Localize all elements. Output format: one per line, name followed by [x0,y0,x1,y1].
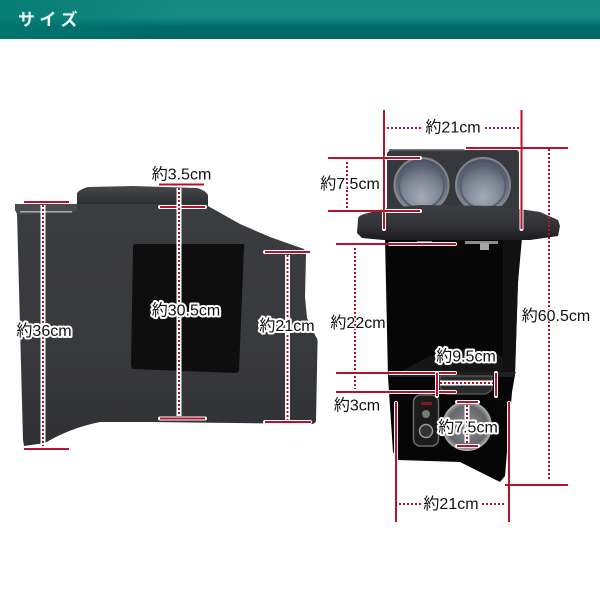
dimension: 約30.5cm: 約30.5cm [152,302,220,320]
rear panel [387,150,519,210]
dimension: 約9.5cm: 約9.5cm [436,348,496,366]
dimension: 約60.5cm: 約60.5cm [522,307,590,325]
tray [440,376,492,394]
dimension: 約21cm bottom [396,402,509,522]
dimension: 約3cm [334,373,456,414]
dimension: 約7.5cm cup depth [320,158,420,211]
dimension: 約21cm side: 約21cm [259,317,315,335]
dimension: 約9.5cm [436,348,496,396]
panel: side view of console [15,186,318,446]
dimension: 約21cm top [384,110,522,229]
dimension: 約22cm: 約22cm [330,314,386,332]
dimension: 約3.5cm: 約3.5cm [152,166,211,184]
front cup holder [442,401,492,451]
recessed window [131,244,244,373]
side wall shade [503,240,521,372]
armrest [357,205,560,240]
switch panel [414,395,438,446]
cup holder right [456,158,510,212]
dimension: 約21cm top: 約21cm [425,118,481,136]
shelf [388,372,516,377]
title: サイズ [18,10,82,30]
header band [0,0,600,39]
black storage body [385,238,522,482]
armrest lid [77,186,208,204]
dimension: 約7.5cm cup depth: 約7.5cm [320,175,380,193]
console side body [17,202,318,446]
panel: front view of console [357,149,560,482]
brackets [417,241,432,246]
dimension: 約3cm: 約3cm [334,396,380,414]
dimension: 約7.5cm front cup [438,402,498,446]
dimension: 約21cm bottom: 約21cm [423,495,479,513]
dimension: 約3.5cm [152,166,211,207]
cup holder left [394,158,448,212]
dimension: 約7.5cm front cup: 約7.5cm [438,418,498,436]
dimension: 約36cm: 約36cm [16,322,72,340]
lower shelf shade [400,348,503,372]
metal strip [15,204,77,214]
